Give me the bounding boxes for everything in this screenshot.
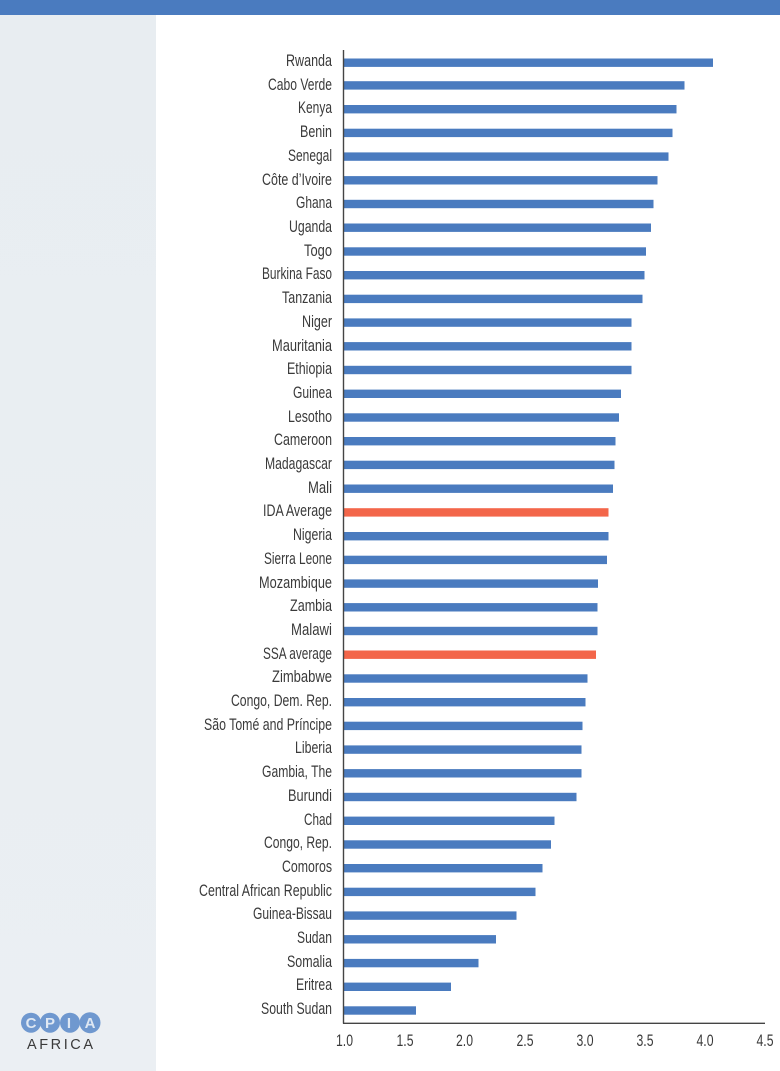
country labels: Comoros — [282, 858, 332, 876]
country labels: Madagascar — [265, 455, 332, 473]
x axis tick labels: 3.5 — [636, 1032, 654, 1050]
x axis tick labels: 1.0 — [336, 1032, 353, 1050]
country labels: Nigeria — [293, 526, 333, 544]
x axis tick labels: 2.0 — [456, 1032, 473, 1050]
logo: CPIA Africa: A — [85, 1015, 96, 1032]
country labels: Mali — [308, 479, 332, 497]
country labels: Togo — [304, 242, 332, 260]
country labels: Lesotho — [288, 408, 332, 426]
country labels: Zimbabwe — [272, 668, 332, 686]
country labels: Sierra Leone — [264, 550, 332, 568]
logo: CPIA Africa: I — [67, 1015, 71, 1032]
x axis tick labels: 3.0 — [576, 1032, 594, 1050]
country labels: Uganda — [289, 218, 333, 236]
country labels: Kenya — [298, 99, 333, 117]
x axis tick labels: 4.0 — [696, 1032, 714, 1050]
country labels: Mauritania — [272, 337, 333, 355]
country labels: Côte d’Ivoire — [262, 171, 332, 189]
country labels — [199, 52, 333, 1018]
logo: CPIA Africa: C — [26, 1015, 37, 1032]
left sidebar panel — [0, 15, 156, 1071]
logo: CPIA Africa: P — [45, 1015, 55, 1032]
country labels: Tanzania — [282, 289, 333, 307]
x axis tick labels: 2.5 — [516, 1032, 534, 1050]
country labels: Senegal — [288, 147, 332, 165]
country labels: Malawi — [291, 621, 332, 639]
country labels: Congo, Rep. — [264, 834, 332, 852]
country labels: Eritrea — [296, 976, 333, 994]
country labels: Chad — [304, 811, 332, 829]
top banner — [0, 0, 780, 15]
country labels: Burkina Faso — [262, 265, 332, 283]
country labels: Gambia, The — [262, 763, 332, 781]
country labels: São Tomé and Príncipe — [204, 716, 332, 734]
country labels: Guinea-Bissau — [253, 905, 332, 923]
country labels: Rwanda — [286, 52, 333, 70]
country labels: Sudan — [297, 929, 332, 947]
country labels: Burundi — [288, 787, 332, 805]
country labels: Benin — [300, 123, 332, 141]
country labels: SSA average — [263, 645, 332, 663]
country labels: IDA Average — [263, 502, 332, 520]
x axis tick labels: 4.5 — [756, 1032, 774, 1050]
country labels: Niger — [302, 313, 332, 331]
country labels: Guinea — [293, 384, 333, 402]
IDA average bar — [344, 508, 608, 517]
country labels: Central African Republic — [199, 882, 332, 900]
country labels: Mozambique — [259, 574, 332, 592]
chart axes — [343, 50, 765, 1024]
country labels: Zambia — [290, 597, 333, 615]
country labels: Ghana — [296, 194, 333, 212]
country labels: Cameroon — [274, 431, 332, 449]
x axis tick labels: 1.5 — [396, 1032, 414, 1050]
logo: CPIA Africa: AFRICA — [27, 1037, 93, 1053]
country labels: Ethiopia — [287, 360, 333, 378]
country labels: Cabo Verde — [268, 76, 332, 94]
country labels: South Sudan — [261, 1000, 332, 1018]
x axis tick labels — [336, 1032, 774, 1050]
logo: CPIA Africa — [21, 1012, 100, 1053]
SSA average bar — [344, 650, 596, 659]
country labels: Somalia — [287, 953, 333, 971]
country labels: Liberia — [295, 739, 333, 757]
country labels: Congo, Dem. Rep. — [231, 692, 332, 710]
bar chart — [344, 58, 713, 1015]
